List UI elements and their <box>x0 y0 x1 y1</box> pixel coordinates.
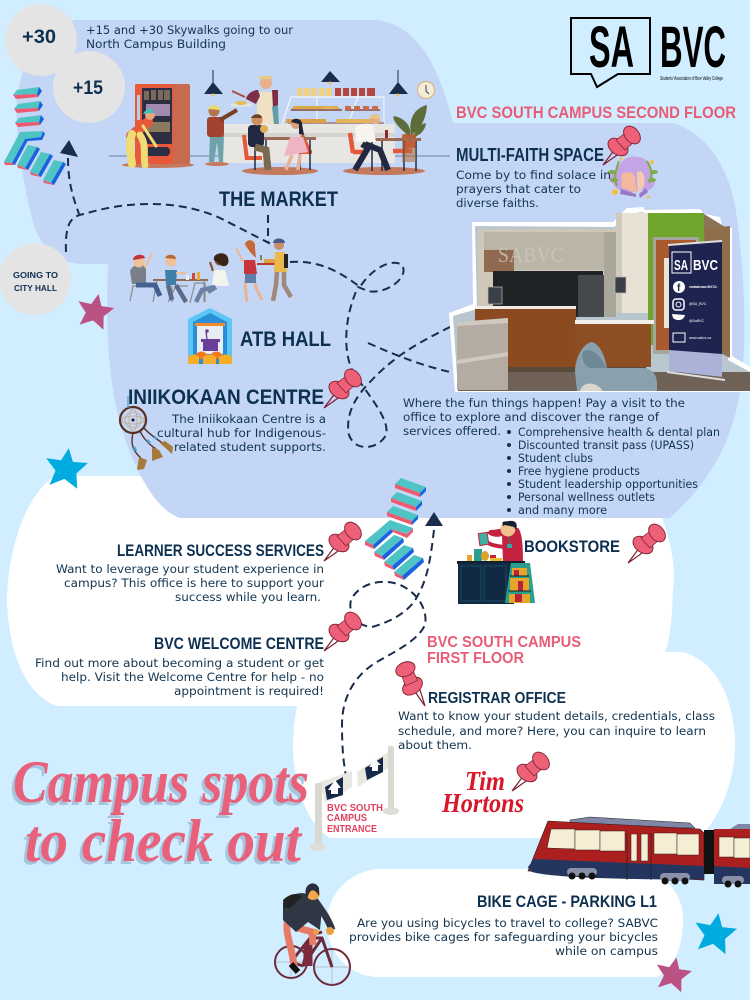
logo: SABVC <box>571 15 726 87</box>
list: services offered: Student clubs <box>518 451 593 465</box>
stairs: skywalk left <box>4 87 66 185</box>
text: welcome centre description: appointment is required! <box>174 684 324 698</box>
heading: learner success services: LEARNER SUCCESS SERVICES <box>117 541 324 560</box>
text: multi-faith description <box>456 168 611 210</box>
list: services offered <box>507 425 720 517</box>
heading: bookstore: BOOKSTORE <box>524 537 620 556</box>
text: welcome centre description <box>35 656 325 698</box>
text: students' association description: Where the fun things happen! Pay a visit to the <box>403 396 685 410</box>
heading: the market: THE MARKET <box>219 188 338 211</box>
icon: bookstore clerk <box>457 521 535 604</box>
photo: SABVC office: SA <box>674 257 688 274</box>
heading: bike cage: BIKE CAGE - PARKING L1 <box>477 892 657 911</box>
heading: first floor <box>427 634 581 667</box>
photo: SABVC office: SABVC <box>498 242 564 267</box>
pin: registrar <box>385 654 438 706</box>
circle: going to city hall <box>0 243 71 315</box>
label: entrance: ENTRANCE <box>327 824 377 835</box>
text: Iniikokaan description: cultural hub for Indigenous- <box>157 426 326 440</box>
photo: SABVC office: www.sabvc.ca <box>689 336 711 340</box>
label: entrance: CAMPUS <box>327 813 367 824</box>
pin: learner success <box>324 519 365 561</box>
text: Iniikokaan description: The Iniikokaan Centre is a <box>171 412 326 426</box>
text: learner success description: Want to leverage your student experience in <box>56 562 324 576</box>
logo: Tim Hortons <box>441 766 524 818</box>
photo: SABVC office: @SA_BVC <box>689 302 707 306</box>
circle: going to city hall: GOING TO <box>13 270 58 280</box>
illustration: the market <box>109 70 450 175</box>
title: campus spots to check out: to check out <box>22 811 300 877</box>
text: skywalk note <box>86 23 293 51</box>
title: campus spots to check out <box>10 749 309 877</box>
text: bike cage description: while on campus <box>555 944 658 958</box>
label: entrance: BVC SOUTH <box>327 803 383 814</box>
list: services offered: Personal wellness outlets <box>518 490 655 504</box>
heading: registrar office: REGISTRAR OFFICE <box>428 690 566 707</box>
text: learner success description: success while you learn. <box>175 590 321 604</box>
heading: first floor: BVC SOUTH CAMPUS <box>427 634 581 651</box>
photo: SABVC office: @SaBVC <box>689 319 705 323</box>
list: services offered: Comprehensive health & dental plan <box>518 425 720 439</box>
circle: going to city hall: CITY HALL <box>14 283 57 293</box>
text: welcome centre description: Find out more about becoming a student or get <box>35 656 325 670</box>
text: skywalk note: North Campus Building <box>86 37 226 51</box>
sign: entrance gate <box>310 746 399 851</box>
title: campus spots to check out: Campus spots <box>10 752 306 818</box>
star: blue left <box>43 445 90 490</box>
title: campus spots to check out: Campus spots <box>13 749 309 815</box>
heading: first floor: FIRST FLOOR <box>427 650 524 667</box>
circle: +30 skywalk <box>5 4 77 76</box>
icon: praying hands <box>608 157 658 198</box>
logo: SABVC: SA <box>589 15 634 80</box>
label: entrance <box>327 803 383 835</box>
pin: welcome centre <box>324 609 365 651</box>
text: registrar description <box>398 709 715 752</box>
panel: bike cage background <box>327 869 683 977</box>
path: dashed route lower <box>342 530 434 776</box>
text: students' association description <box>403 396 685 438</box>
logo: Tim Hortons: Hortons <box>441 788 524 818</box>
pin: bookstore <box>628 521 669 563</box>
circle: +15 skywalk: +15 <box>73 78 103 99</box>
text: Iniikokaan description: related student supports. <box>174 440 326 454</box>
star: pink right <box>652 954 694 994</box>
text: Iniikokaan description <box>157 412 326 454</box>
illustration: cyclist <box>275 883 350 985</box>
heading: Iniikokaan Centre: INIIKOKAAN CENTRE <box>128 386 324 409</box>
text: bike cage description: provides bike cages for safeguarding your bicycles <box>349 930 658 944</box>
pin: Tim Hortons <box>512 749 553 791</box>
text: students' association description: office to explore and discover the range of <box>403 410 660 424</box>
heading: multi-faith space: MULTI-FAITH SPACE <box>456 145 604 165</box>
stairs: center <box>365 478 426 580</box>
arrow: route to second floor <box>425 512 443 526</box>
path: dashed route upper <box>66 158 450 447</box>
star: blue right <box>691 910 739 955</box>
arrow: route to skywalk <box>60 140 78 157</box>
illustration: students at ATB table <box>130 238 291 303</box>
circle: +30 skywalk: +30 <box>22 27 56 48</box>
text: multi-faith description: diverse faiths. <box>456 196 539 210</box>
text: registrar description: about them. <box>398 738 472 752</box>
list: services offered: Free hygiene products <box>518 464 640 478</box>
icon: dreamcatcher <box>120 396 173 470</box>
illustration: train <box>528 817 750 888</box>
pin: Iniikokaan <box>324 366 365 408</box>
photo: SABVC office: f <box>677 283 681 294</box>
photo: SABVC office: BVC <box>693 257 718 274</box>
text: bike cage description <box>349 916 658 958</box>
text: registrar description: Want to know your student details, credentials, class <box>398 709 715 723</box>
heading: ATB Hall: ATB HALL <box>240 328 331 351</box>
panel: second floor background <box>16 20 744 518</box>
list: services offered: Student leadership opportunities <box>518 477 698 491</box>
circle: +15 skywalk <box>53 51 125 123</box>
text: bike cage description: Are you using bicycles to travel to college? SABVC <box>357 916 658 930</box>
text: students' association description: services offered. <box>403 424 501 438</box>
text: welcome centre description: help. Visit the Welcome Centre for help - no <box>61 670 324 684</box>
pin: multi-faith <box>603 123 644 165</box>
text: multi-faith description: Come by to find solace in <box>456 168 611 182</box>
text: learner success description <box>56 562 324 604</box>
panel: first floor background <box>7 476 735 838</box>
heading: BVC welcome centre: BVC WELCOME CENTRE <box>154 634 324 653</box>
text: registrar description: schedule, and more? Here, you can inquire to learn <box>398 724 706 738</box>
photo: SABVC office <box>449 207 750 392</box>
icon: ATB Hall <box>188 308 232 364</box>
star: pink left <box>74 290 116 331</box>
text: multi-faith description: prayers that cater to <box>456 182 581 196</box>
list: services offered: and many more <box>518 503 607 517</box>
title: campus spots to check out: to check out <box>25 808 303 874</box>
photo: SABVC office: www.facebook.com/BVCSA <box>689 285 718 289</box>
logo: Tim Hortons: Tim <box>465 766 505 796</box>
text: skywalk note: +15 and +30 Skywalks going to our <box>86 23 293 37</box>
text: learner success description: campus? This office is here to support your <box>64 576 324 590</box>
list: services offered: Discounted transit pass (UPASS) <box>518 438 694 452</box>
